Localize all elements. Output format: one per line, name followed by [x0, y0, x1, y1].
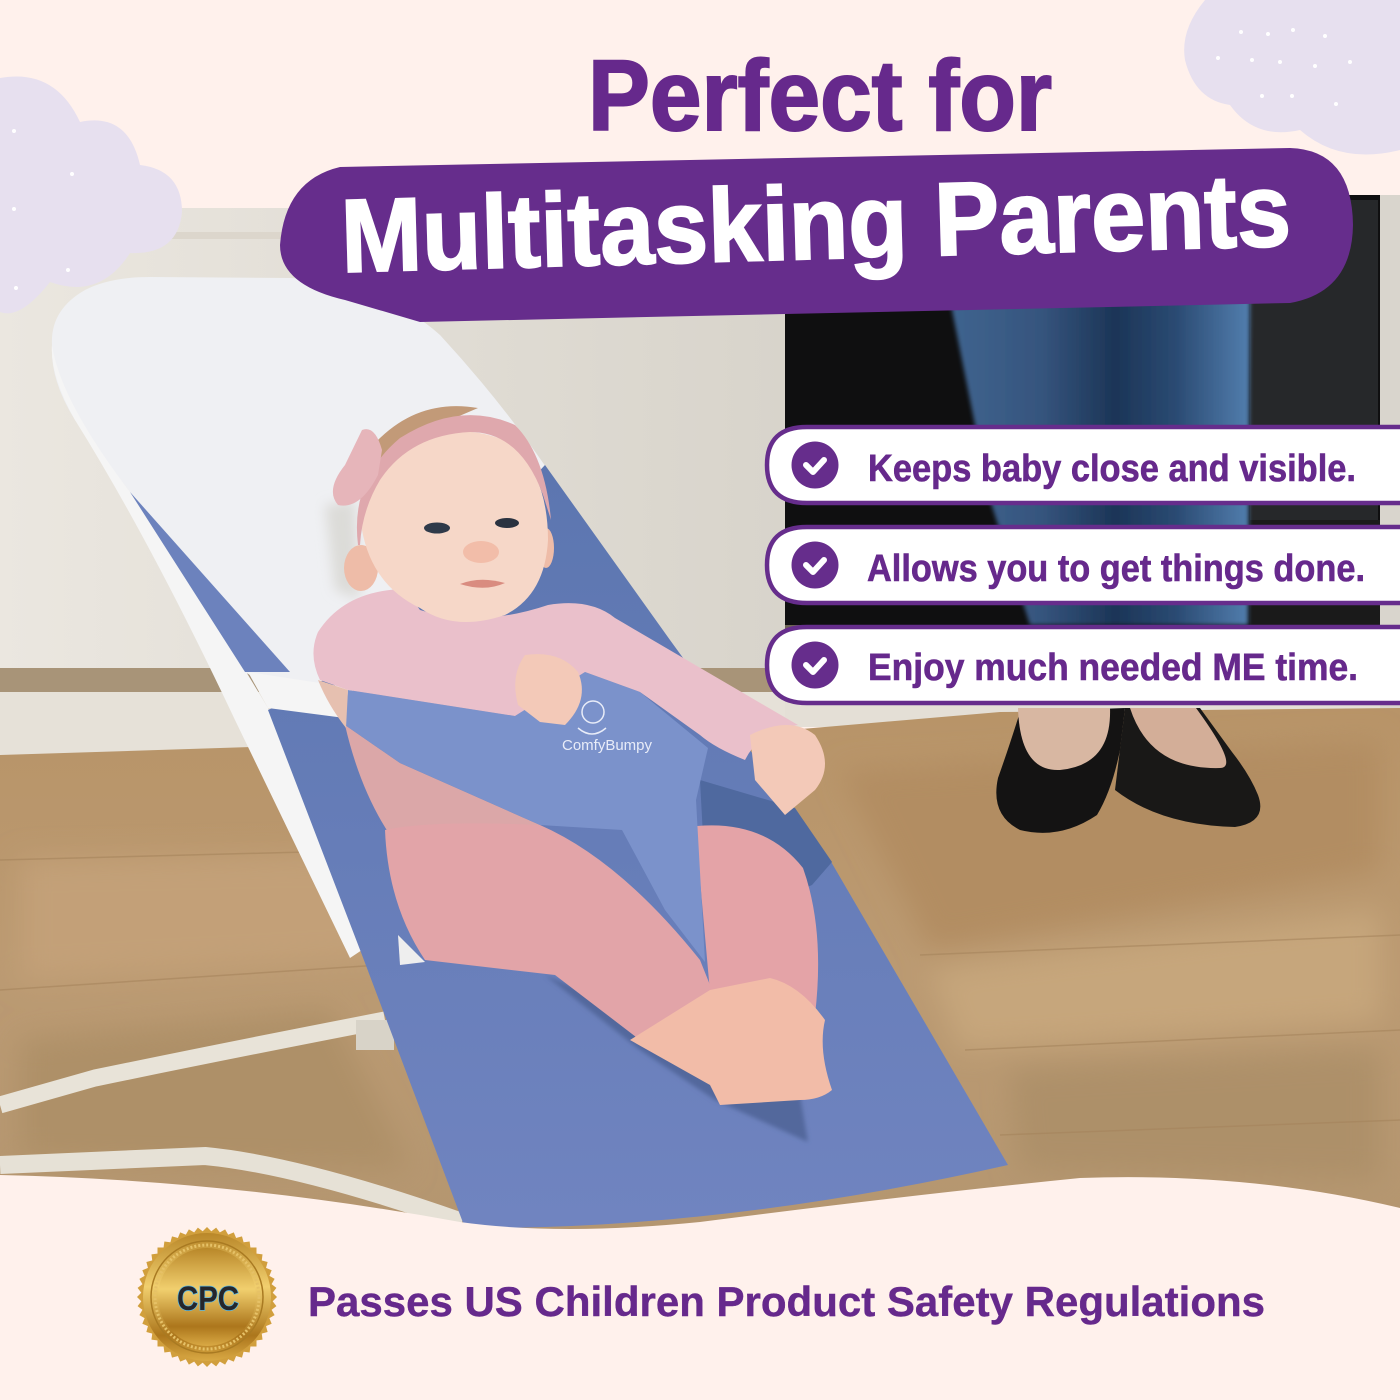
wall: [0, 208, 785, 670]
shadow under arm: [700, 780, 832, 930]
title banner: Multitasking Parents: Multitasking Parents: [339, 153, 1292, 295]
benefit: me time: Enjoy much needed ME time.: [868, 647, 1358, 689]
icon: check: [792, 442, 838, 488]
harness: [345, 672, 708, 962]
title: Perfect for: Perfect for: [588, 40, 1052, 152]
cloud: left: [0, 76, 182, 313]
safety statement: Passes US Children Product Safety Regulations: [308, 1278, 1265, 1325]
shoes: [996, 708, 1125, 833]
white strap clip: [248, 672, 360, 720]
benefit: me time: [767, 627, 1400, 703]
standing parent: [950, 300, 1260, 833]
headband: [357, 415, 551, 545]
baby feet: [630, 978, 832, 1105]
bottom wave panel: [0, 1175, 1400, 1400]
baby pants: [385, 823, 712, 1040]
ears: [344, 545, 378, 591]
CPC gold seal: CPC: [177, 1280, 239, 1318]
bear mark: [578, 701, 606, 734]
jeans: [950, 300, 1250, 625]
eyes: [424, 522, 450, 534]
icon: check: [792, 542, 838, 588]
white frame: [52, 345, 362, 958]
wood floor: [0, 708, 1400, 1240]
dark oven: [785, 195, 1380, 625]
baby: [313, 406, 832, 1105]
baby hands: [515, 654, 582, 725]
blue seat: [268, 465, 1008, 1228]
baby torso: [345, 725, 540, 845]
bow: [333, 429, 382, 506]
top cream panel: [0, 0, 1400, 208]
bouncer chair: [0, 277, 1008, 1228]
cloud: right: [1184, 0, 1400, 154]
icon: check: [792, 642, 838, 688]
benefit: keeps baby close: Keeps baby close and visible.: [868, 448, 1356, 490]
head: [362, 431, 548, 622]
shadow under baby: [545, 975, 808, 1142]
mesh back: [52, 277, 548, 700]
CPC gold seal: [137, 1227, 277, 1367]
logo on harness: [562, 701, 652, 754]
logo on harness: ComfyBumpy: [562, 737, 652, 754]
wire frame: [0, 1020, 385, 1105]
nose and mouth: [463, 541, 499, 563]
blue side strip: [130, 492, 290, 672]
serrated edge: [137, 1227, 277, 1367]
benefit: get things done: [767, 527, 1400, 603]
hair: [375, 406, 478, 470]
legs: [1018, 708, 1110, 770]
benefit: keeps baby close: [767, 427, 1400, 503]
sweater: [313, 589, 798, 760]
